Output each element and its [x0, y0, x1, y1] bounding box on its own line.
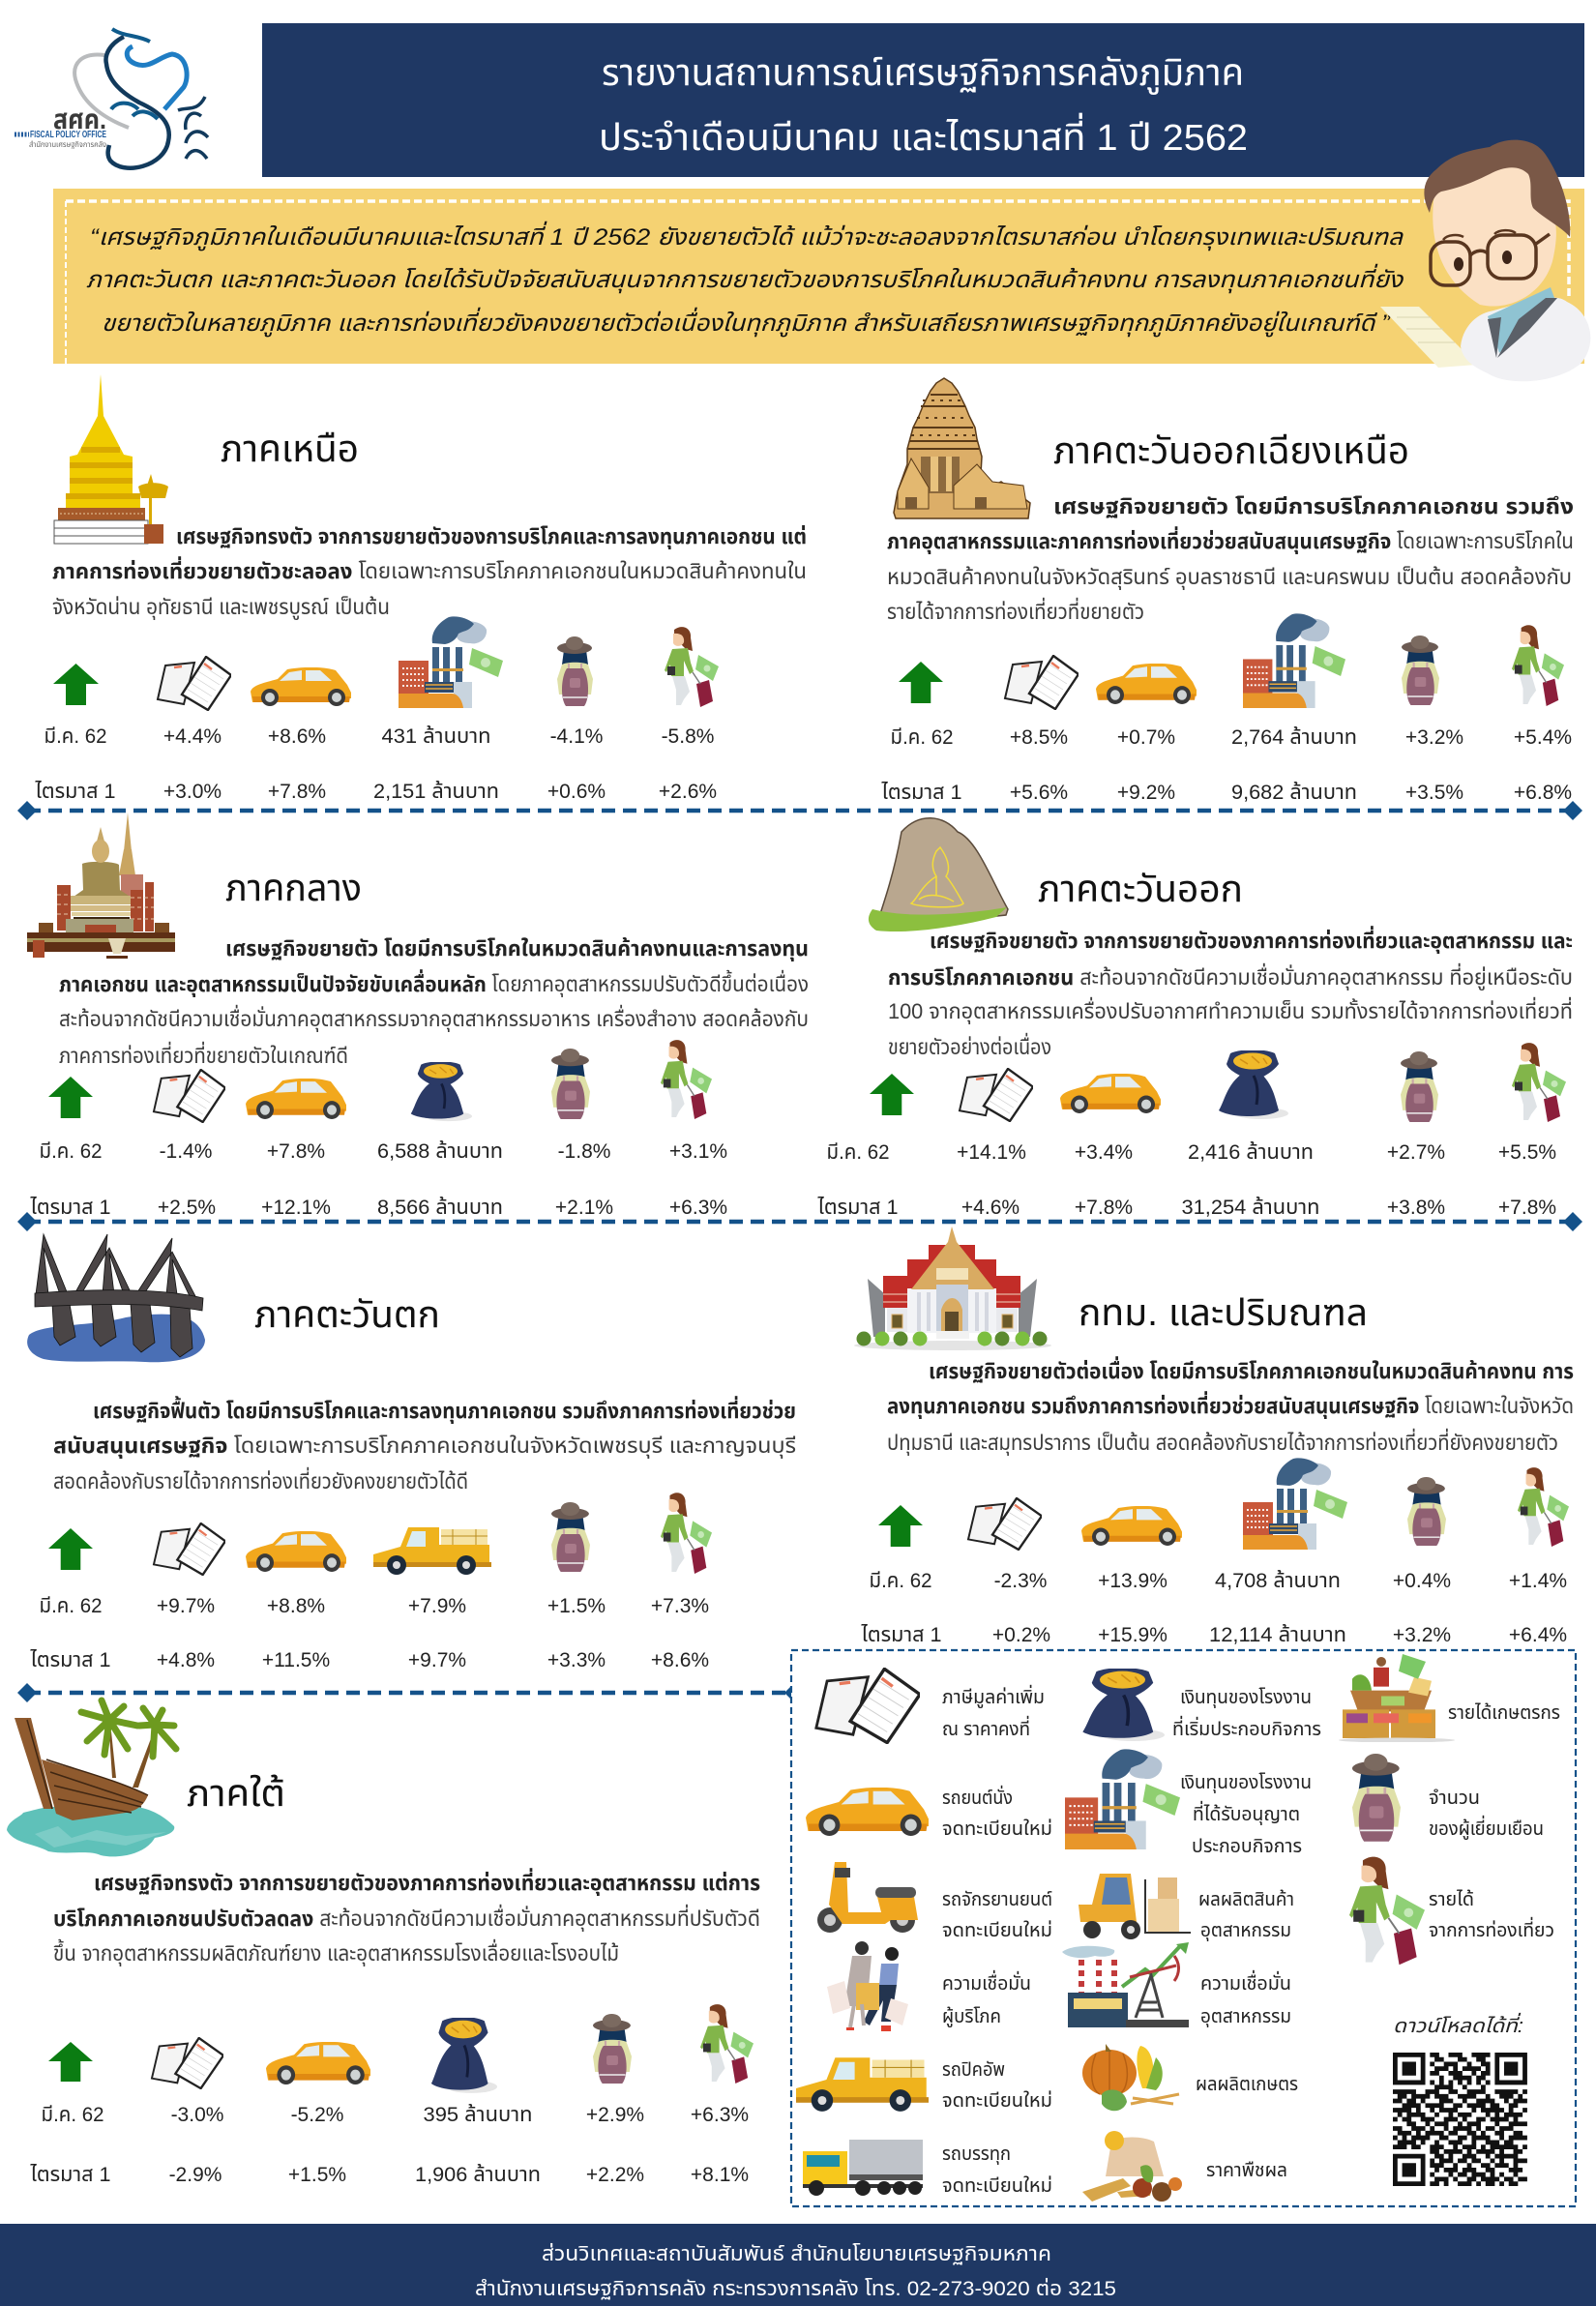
panel: eastern region: [816, 818, 1573, 1219]
logo: fiscal policy office: FISCAL POLICY OFFICE: [30, 130, 106, 140]
icons row: [48, 1040, 712, 1122]
legend: motorcycles: รถจักรยานยนต์: [942, 1889, 1052, 1910]
stats: quarter 1: 9,682 ล้านบาท: [1231, 781, 1357, 804]
stats: quarter 1: +6.8%: [1514, 782, 1572, 804]
stats: March: +8.6%: [268, 725, 326, 748]
legend: licensed factory capital: ที่ได้รับอนุญาต: [1193, 1800, 1300, 1825]
stats: March: 2,764 ล้านบาท: [1231, 725, 1357, 749]
stats: March: 2,416 ล้านบาท: [1188, 1140, 1314, 1164]
stats: quarter 1: +9.7%: [408, 1649, 466, 1671]
stats: quarter 1: [816, 1196, 1556, 1219]
icon: long-tail boat and palms: [7, 1700, 176, 1856]
stats: March: +5.4%: [1514, 726, 1572, 749]
stats: March: -1.4%: [160, 1140, 212, 1163]
text block: ภาคการท่องเที่ยวที่ขยายตัวในเกณฑ์ดี: [59, 1041, 348, 1068]
stats: March: +0.7%: [1117, 726, 1175, 749]
stats: March: [869, 1569, 1567, 1592]
text block: ลงทุนภาคเอกชน รวมถึงภาคการท่องเที่ยวช่วยสนับสนุนเศรษฐกิจ โดยเฉพาะในจังหวัด: [887, 1391, 1574, 1419]
panel: northeast region: [880, 378, 1574, 804]
heading: ภาคตะวันตก: [254, 1295, 440, 1336]
stats: March: +13.9%: [1098, 1570, 1167, 1592]
stats: quarter 1: [29, 1196, 727, 1219]
icon: doctor reading: [1380, 140, 1590, 381]
text block: การบริโภคภาคเอกชน สะท้อนจากดัชนีความเชื่อมั่นภาคอุตสาหกรรม ที่อยู่เหนือระดับ: [888, 962, 1573, 990]
stats: March: มี.ค. 62: [41, 2104, 104, 2126]
legend: licensed factory capital: ประกอบกิจการ: [1192, 1836, 1302, 1857]
heading: ภาคเหนือ: [221, 429, 359, 470]
legend: licensed factory capital: เงินทุนของโรงงาน: [1180, 1772, 1312, 1793]
report title: รายงานสถานการณ์เศรษฐกิจการคลังภูมิภาค: [602, 53, 1244, 95]
legend: consumer confidence: ผู้บริโภค: [942, 2005, 1001, 2028]
stats: March: มี.ค. 62: [39, 1140, 103, 1163]
text block: จังหวัดน่าน อุทัยธานี และเพชรบูรณ์ เป็นต้น: [52, 595, 390, 620]
text block: [53, 1868, 760, 1966]
stats: quarter 1: +7.8%: [268, 781, 326, 803]
legend: consumer confidence: [827, 1941, 1031, 2031]
stats: quarter 1: 1,906 ล้านบาท: [415, 2163, 541, 2186]
stats: March: +9.7%: [157, 1595, 215, 1617]
legend: industrial confidence: [1062, 1942, 1291, 2027]
stats: quarter 1: +3.0%: [163, 781, 222, 803]
legend: trucks: จดทะเบียนใหม่: [942, 2174, 1052, 2197]
stats: March: +1.5%: [547, 1595, 606, 1617]
stats: March: มี.ค. 62: [890, 726, 954, 749]
stats: quarter 1: 8,566 ล้านบาท: [377, 1196, 503, 1219]
icons row: [53, 616, 719, 710]
stats: March: 431 ล้านบาท: [381, 724, 491, 748]
icons row: [899, 613, 1564, 709]
panel: summary quote: ขยายตัวในหลายภูมิภาค และการท่องเที่ยวยังคงขยายตัวต่อเนื่องในทุกภูมิภาค สำหรับเสถียรภาพเศรษฐกิจทุกภูมิภาคยังอยู่ในเกณฑ์ดี ”: [102, 307, 1391, 338]
icon: rock with Buddha: [869, 818, 1008, 931]
legend: VAT: ภาษีมูลค่าเพิ่ม: [942, 1684, 1045, 1709]
legend: farm income: รายได้เกษตรกร: [1448, 1701, 1560, 1724]
text block: 100 จากอุตสาหกรรมเครื่องปรับอากาศทำความเย็น รวมทั้งรายได้จากการท่องเที่ยวที่: [888, 996, 1573, 1024]
text block: เศรษฐกิจขยายตัว จากการขยายตัวของภาคการท่องเที่ยวและอุตสาหกรรม และ: [930, 926, 1573, 954]
heading: ภาคตะวันออกเฉียงเหนือ: [1053, 431, 1409, 472]
legend: industrial output: ผลผลิตสินค้า: [1198, 1888, 1294, 1910]
stats: quarter 1: +2.6%: [659, 781, 717, 803]
text block: ภาคเอกชน และอุตสาหกรรมเป็นปัจจัยขับเคลื่อนหลัก โดยภาคอุตสาหกรรมปรับตัวดีขึ้นต่อเนื่อง: [59, 969, 809, 997]
stats: March: +8.5%: [1010, 726, 1068, 749]
stats: March: +6.3%: [691, 2104, 749, 2126]
legend: trucks: รถบรรทุก: [942, 2143, 1011, 2165]
stats: March: +3.1%: [669, 1140, 727, 1163]
stats: quarter 1: 2,151 ล้านบาท: [373, 780, 499, 803]
legend: visitors: ของผู้เยี่ยมเยือน: [1429, 1815, 1544, 1841]
text block: ขึ้น จากอุตสาหกรรมผลิตภัณฑ์ยาง และอุตสาหกรรมโรงเลื่อยและโรงอบไม้: [53, 1938, 619, 1966]
icon: Buddha and ruins: [27, 813, 175, 959]
legend: VAT: ณ ราคาคงที่: [942, 1715, 1030, 1740]
text block: เศรษฐกิจฟื้นตัว โดยมีการบริโภคและการลงทุนภาคเอกชน รวมถึงภาคการท่องเที่ยวช่วย: [93, 1396, 796, 1424]
stats: quarter 1: -2.9%: [169, 2164, 222, 2186]
legend: crop prices: ราคาพืชผล: [1206, 2160, 1287, 2181]
text block: สนับสนุนเศรษฐกิจ โดยเฉพาะการบริโภคภาคเอกชนในจังหวัดเพชรบุรี และกาญจนบุรี: [53, 1434, 796, 1459]
legend: trucks: [803, 2140, 1052, 2197]
icon: stone sanctuary: [894, 378, 1030, 518]
stats: quarter 1: +15.9%: [1098, 1624, 1167, 1646]
stats: March: +0.4%: [1393, 1570, 1451, 1592]
heading: ภาคกลาง: [225, 869, 362, 909]
panel: southern region: [7, 1700, 760, 2186]
text block: รายได้จากการท่องเที่ยวที่ขยายตัว: [887, 597, 1144, 624]
legend: passenger cars: รถยนต์นั่ง: [942, 1785, 1013, 1809]
panel: summary quote: “เศรษฐกิจภูมิภาคในเดือนมีนาคมและไตรมาสที่ 1 ปี 2562 ยังขยายตัวได้ แม้ว่าจะชะลอลงจากไตรมาสก่อน นำโดยกรุงเทพและปริมณฑล: [90, 221, 1404, 251]
stats: March: +7.9%: [408, 1595, 466, 1617]
legend: passenger cars: จดทะเบียนใหม่: [942, 1818, 1052, 1840]
text block: ภาคอุตสาหกรรมและภาคการท่องเที่ยวช่วยสนับสนุนเศรษฐกิจ โดยเฉพาะการบริโภคใน: [887, 526, 1574, 554]
text block: สอดคล้องกับรายได้จากการท่องเที่ยวยังคงขยายตัวได้ดี: [53, 1466, 468, 1493]
stats: March: +1.4%: [1509, 1570, 1567, 1592]
icons row: [48, 2004, 754, 2093]
stats: March: [826, 1140, 1556, 1164]
stats: March: 6,588 ล้านบาท: [377, 1139, 503, 1163]
stats: March: -2.3%: [994, 1570, 1047, 1592]
stats: March: +2.9%: [586, 2104, 644, 2126]
stats: quarter 1: +9.2%: [1117, 782, 1175, 804]
stats: quarter 1: ไตรมาส 1: [29, 2164, 110, 2186]
stats: quarter 1: +12.1%: [261, 1197, 331, 1219]
icons row: [870, 1043, 1566, 1122]
stats: March: +3.4%: [1075, 1141, 1133, 1164]
legend: industrial output: อุตสาหกรรม: [1200, 1920, 1291, 1941]
stats: quarter 1: ไตรมาส 1: [860, 1624, 942, 1646]
legend: tourism income: [1349, 1857, 1554, 1965]
header banner: [262, 23, 1584, 177]
stats: quarter 1: [29, 1649, 709, 1671]
legend: pickups: รถปิคอัพ: [942, 2059, 1005, 2081]
stats: March: มี.ค. 62: [39, 1595, 103, 1617]
stats: March: +8.8%: [267, 1595, 325, 1617]
stats: March: [890, 725, 1572, 749]
stats: quarter 1: +3.5%: [1405, 782, 1463, 804]
stats: quarter 1: ไตรมาส 1: [34, 781, 116, 803]
stats: quarter 1: +8.6%: [651, 1649, 709, 1671]
legend: new factory capital: ที่เริ่มประกอบกิจการ: [1172, 1715, 1321, 1740]
stats: quarter 1: +3.3%: [547, 1649, 606, 1671]
text block: [59, 936, 809, 1068]
legend: farm output: ผลผลิตเกษตร: [1196, 2074, 1298, 2095]
text block: เศรษฐกิจขยายตัว โดยมีการบริโภคภาคเอกชน รวมถึง: [1053, 494, 1574, 518]
text block: สะท้อนจากดัชนีความเชื่อมั่นภาคอุตสาหกรรมจากอุตสาหกรรมอาหาร เครื่องสำอาง สอดคล้องกับ: [59, 1004, 809, 1032]
stats: March: +2.7%: [1387, 1141, 1445, 1164]
stats: quarter 1: 31,254 ล้านบาท: [1182, 1196, 1319, 1219]
text block: บริโภคภาคเอกชนปรับตัวลดลง สะท้อนจากดัชนีความเชื่อมั่นภาคอุตสาหกรรมที่ปรับตัวดี: [53, 1904, 760, 1932]
text block: เศรษฐกิจทรงตัว จากการขยายตัวของภาคการท่องเที่ยวและอุตสาหกรรม แต่การ: [94, 1868, 760, 1896]
stats: quarter 1: [34, 780, 717, 803]
footer: ส่วนวิเทศและสถาบันสัมพันธ์ สำนักนโยบายเศรษฐกิจมหภาค: [542, 2242, 1051, 2265]
stats: March: -5.8%: [662, 725, 714, 748]
stats: March: [39, 1139, 727, 1163]
heading: ภาคใต้: [187, 1774, 285, 1815]
stats: March: +4.4%: [163, 725, 222, 748]
text block: [52, 524, 807, 620]
legend: consumer confidence: ความเชื่อมั่น: [942, 1969, 1031, 1995]
report title: ประจำเดือนมีนาคม และไตรมาสที่ 1 ปี 2562: [599, 112, 1248, 159]
stats: March: [41, 2103, 749, 2126]
panel: central region: [27, 813, 809, 1219]
stats: March: มี.ค. 62: [869, 1570, 932, 1592]
stats: quarter 1: +7.8%: [1498, 1197, 1556, 1219]
legend: motorcycles: [817, 1862, 1052, 1941]
legend: pickups: [796, 2057, 1052, 2112]
legend: crop prices: [1082, 2131, 1287, 2202]
stats: March: [44, 724, 714, 748]
panel: western region: [27, 1234, 796, 1671]
panel: summary quote: [53, 189, 1584, 364]
stats: quarter 1: +0.6%: [547, 781, 606, 803]
legend: pickups: จดทะเบียนใหม่: [942, 2089, 1052, 2112]
panel: north region: [34, 374, 807, 803]
icon: golden stupa: [54, 374, 168, 544]
stats: quarter 1: [880, 781, 1572, 804]
logo: fiscal policy office: สำนักงานเศรษฐกิจการคลัง: [29, 140, 106, 149]
stats: quarter 1: +2.2%: [586, 2164, 644, 2186]
stats: quarter 1: +11.5%: [262, 1649, 330, 1671]
legend: industrial confidence: อุตสาหกรรม: [1200, 2006, 1291, 2027]
legend: visitors: จำนวน: [1429, 1788, 1480, 1809]
heading: ภาคตะวันออก: [1038, 870, 1243, 910]
legend: farm income: [1339, 1654, 1560, 1742]
stats: quarter 1: +5.6%: [1010, 782, 1068, 804]
logo: fiscal policy office: สศค.: [53, 104, 106, 134]
legend: tourism income: รายได้: [1429, 1888, 1474, 1910]
legend: passenger cars: [806, 1785, 1052, 1840]
text block: เศรษฐกิจขยายตัว โดยมีการบริโภคในหมวดสินค้าคงทนและการลงทุน: [225, 936, 809, 961]
stats: quarter 1: 12,114 ล้านบาท: [1209, 1623, 1346, 1646]
legend: new factory capital: เงินทุนของโรงงาน: [1180, 1687, 1312, 1708]
stats: quarter 1: +0.2%: [992, 1624, 1050, 1646]
stats: March: +3.2%: [1405, 726, 1463, 749]
stats: March: +7.3%: [651, 1595, 709, 1617]
legend: new factory capital: [1082, 1668, 1321, 1741]
heading: กทม. และปริมณฑล: [1079, 1293, 1368, 1334]
legend: VAT: [816, 1669, 1045, 1743]
stats: March: [39, 1595, 709, 1617]
stats: quarter 1: [29, 2163, 749, 2186]
panel: Bangkok and vicinity: [854, 1227, 1574, 1646]
footer: [0, 2224, 1596, 2306]
text block: ภาคการท่องเที่ยวขยายตัวชะลอลง โดยเฉพาะการบริโภคภาคเอกชนในหมวดสินค้าคงทนใน: [52, 556, 807, 583]
legend: tourism income: จากการท่องเที่ยว: [1429, 1916, 1554, 1941]
stats: quarter 1: [860, 1623, 1567, 1646]
text block: ขยายตัวอย่างต่อเนื่อง: [888, 1032, 1051, 1059]
legend: licensed factory capital: [1065, 1749, 1312, 1857]
icon: marble temple: [854, 1227, 1051, 1350]
report title: [599, 53, 1248, 159]
stats: March: -3.0%: [171, 2104, 223, 2126]
text block: เศรษฐกิจขยายตัวต่อเนื่อง โดยมีการบริโภคภาคเอกชนในหมวดสินค้าคงทน การ: [929, 1356, 1574, 1383]
stats: quarter 1: +4.6%: [961, 1197, 1020, 1219]
stats: quarter 1: ไตรมาส 1: [29, 1649, 110, 1671]
stats: quarter 1: +6.3%: [669, 1197, 727, 1219]
text block: ปทุมธานี และสมุทรปราการ เป็นต้น สอดคล้องกับรายได้จากการท่องเที่ยวที่ยังคงขยายตัว: [887, 1428, 1558, 1456]
stats: March: +7.8%: [267, 1140, 325, 1163]
icons row: [878, 1458, 1569, 1550]
stats: quarter 1: +3.8%: [1387, 1197, 1445, 1219]
stats: March: -1.8%: [558, 1140, 610, 1163]
logo: fiscal policy office: [15, 29, 208, 168]
stats: March: 395 ล้านบาท: [424, 2103, 532, 2126]
stats: quarter 1: ไตรมาส 1: [816, 1197, 898, 1219]
legend: farm output: [1082, 2044, 1298, 2111]
panel: summary quote: ภาคตะวันตก และภาคตะวันออก โดยได้รับปัจจัยสนับสนุนจากการขยายตัวของการบริโภคในหมวดสินค้าคงทน การลงทุนภาคเอกชนที่ยัง: [86, 263, 1404, 294]
legend: motorcycles: จดทะเบียนใหม่: [942, 1919, 1052, 1941]
stats: quarter 1: +1.5%: [288, 2164, 346, 2186]
QR code: [1393, 2053, 1527, 2186]
stats: quarter 1: +3.2%: [1393, 1624, 1451, 1646]
stats: quarter 1: ไตรมาส 1: [880, 782, 961, 804]
text block: เศรษฐกิจทรงตัว จากการขยายตัวของการบริโภคและการลงทุนภาคเอกชน แต่: [176, 524, 807, 549]
stats: quarter 1: +2.5%: [158, 1197, 216, 1219]
legend: visitors: [1352, 1754, 1544, 1842]
stats: March: มี.ค. 62: [826, 1141, 890, 1164]
stats: March: มี.ค. 62: [44, 725, 106, 748]
panel: legend: [791, 1650, 1576, 2206]
icons row: [48, 1493, 712, 1575]
stats: quarter 1: +7.8%: [1075, 1197, 1133, 1219]
footer: สำนักงานเศรษฐกิจการคลัง กระทรวงการคลัง โทร. 02-273-9020 ต่อ 3215: [475, 2277, 1116, 2300]
icon: bridge over river: [27, 1234, 205, 1362]
text block: [887, 1356, 1574, 1456]
text block: หมวดสินค้าคงทนในจังหวัดสุรินทร์ อุบลราชธานี และนครพนม เป็นต้น สอดคล้องกับ: [887, 565, 1572, 590]
stats: quarter 1: +6.4%: [1509, 1624, 1567, 1646]
text block: [887, 494, 1574, 624]
text block: [888, 926, 1573, 1059]
stats: quarter 1: +4.8%: [157, 1649, 215, 1671]
text block: [53, 1396, 796, 1493]
stats: quarter 1: +8.1%: [691, 2164, 749, 2186]
stats: quarter 1: ไตรมาส 1: [29, 1197, 110, 1219]
stats: March: 4,708 ล้านบาท: [1215, 1569, 1341, 1592]
stats: quarter 1: +2.1%: [555, 1197, 613, 1219]
legend: industrial output: [1079, 1874, 1294, 1941]
stats: March: +14.1%: [957, 1141, 1026, 1164]
stats: March: -4.1%: [550, 725, 603, 748]
legend: industrial confidence: ความเชื่อมั่น: [1200, 1969, 1291, 1995]
stats: March: -5.2%: [291, 2104, 343, 2126]
download label: ดาวน์โหลดได้ที่:: [1393, 2012, 1523, 2037]
stats: March: +5.5%: [1498, 1141, 1556, 1164]
